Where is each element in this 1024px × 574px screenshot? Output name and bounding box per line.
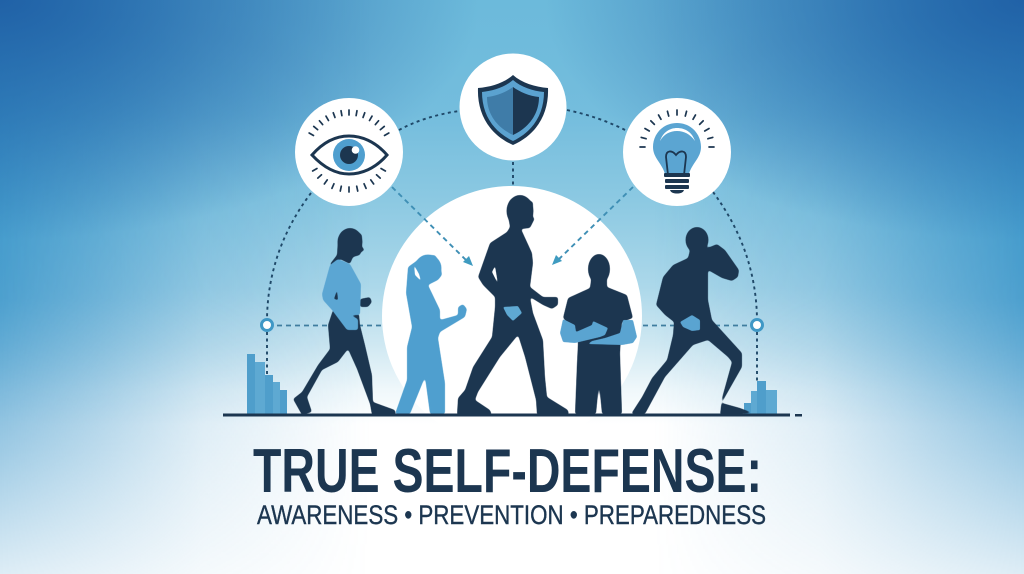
- shield ring: [482, 80, 544, 141]
- pupil: [340, 146, 358, 164]
- eye highlight: [352, 146, 359, 154]
- figure: walking woman: [293, 228, 396, 415]
- eye bottom rays: [313, 168, 385, 192]
- shield right half: [513, 87, 539, 135]
- eye top rays: [309, 110, 389, 136]
- icon circle: eye: [295, 98, 403, 206]
- subtitle: AWARENESS • PREVENTION • PREPAREDNESS: [257, 500, 766, 530]
- shield outer: [478, 75, 548, 145]
- baseline: [223, 414, 802, 416]
- bar chart left: [247, 354, 287, 414]
- icon circle: light bulb: [623, 98, 731, 206]
- shield left half: [487, 87, 513, 135]
- bar chart right: [744, 381, 777, 414]
- bulb glass: [653, 123, 701, 174]
- iris: [333, 139, 365, 171]
- figure: woman with ponytail: [395, 254, 467, 414]
- bulb filament: [666, 151, 686, 175]
- eye outline: [312, 136, 387, 174]
- bulb rays: [640, 110, 714, 147]
- figure: defensive-stance man: [631, 227, 753, 415]
- dashed arrows pointing to the centre: [392, 187, 633, 266]
- title: TRUE SELF-DEFENSE:: [253, 437, 762, 506]
- central white circle: [382, 186, 642, 446]
- bulb base: [664, 173, 690, 194]
- icon circle: shield: [460, 54, 566, 160]
- bulb highlight: [660, 128, 695, 141]
- horizontal dashed lines and nodes: [262, 320, 762, 330]
- dotted connector network: [267, 110, 757, 392]
- figure: man with crossed arms: [560, 254, 637, 414]
- figure: striding man: [457, 195, 569, 415]
